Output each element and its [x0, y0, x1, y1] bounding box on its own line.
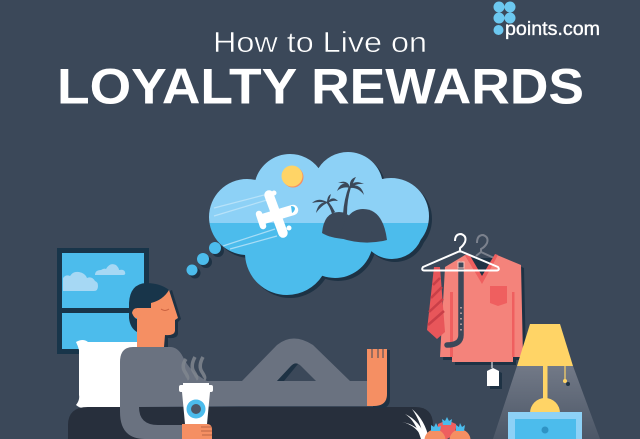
left palm — [312, 194, 338, 214]
sun — [282, 166, 304, 188]
head — [129, 283, 181, 349]
plant on bed end — [402, 409, 429, 439]
island with palm trees — [312, 177, 387, 243]
torso and arm — [120, 347, 240, 439]
plane — [214, 190, 295, 249]
logo: points.com: points.com — [505, 18, 600, 40]
person reclining — [120, 283, 390, 439]
hangers and clothing — [422, 234, 526, 389]
title — [57, 27, 584, 114]
foot — [367, 349, 390, 408]
front hanger — [422, 234, 499, 270]
belt — [447, 262, 464, 345]
lamp light beam — [493, 366, 600, 439]
title: LOYALTY REWARDS — [57, 58, 584, 114]
pillow — [76, 340, 140, 408]
lamp — [517, 324, 573, 413]
nightstand — [508, 412, 582, 439]
clouds in window — [63, 264, 125, 291]
bed — [68, 407, 433, 439]
tie — [427, 267, 445, 339]
title: How to Live on — [213, 27, 427, 59]
thought bubbles — [186, 242, 221, 276]
sky and sea — [209, 152, 429, 295]
logo: points.com — [494, 2, 600, 40]
price tag — [487, 362, 502, 389]
sweater — [440, 254, 526, 365]
steam — [183, 357, 205, 379]
hand — [182, 424, 212, 439]
right palm — [337, 177, 364, 214]
leg and knee — [200, 338, 367, 406]
coffee cup — [179, 383, 213, 424]
back hanger — [476, 235, 494, 258]
window — [57, 248, 149, 354]
strawberries — [424, 417, 470, 439]
thought cloud — [186, 152, 432, 298]
